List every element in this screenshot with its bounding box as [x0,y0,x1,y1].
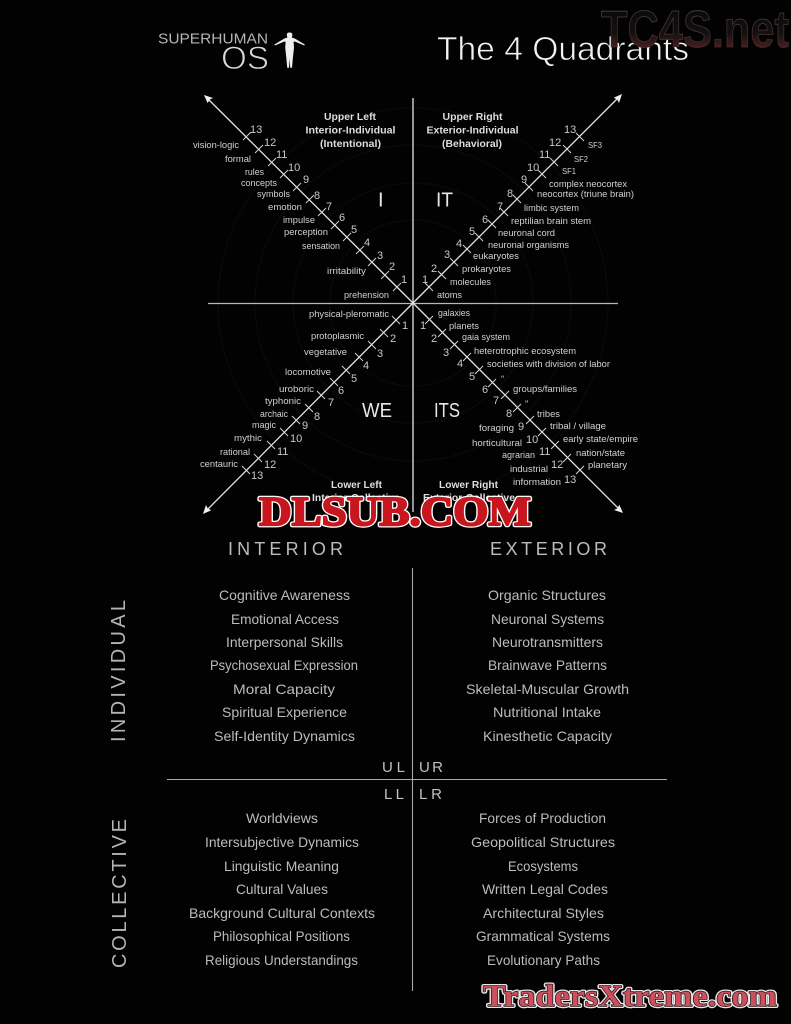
list: lower left interior collective: Religious Understandings [205,952,358,968]
levels: exterior collective: 5 [469,371,475,383]
levels: exterior collective: foraging [479,423,514,434]
list: upper right exterior individual: Organic Structures [488,587,606,603]
levels: interior collective: 1 [402,320,408,332]
panel: lower right quadrant [420,308,638,504]
levels: exterior individual [422,124,634,301]
list: upper right exterior individual: Brainwave Patterns [488,657,607,673]
levels: exterior collective: 8 [506,408,512,420]
levels: interior collective: 5 [351,373,357,385]
watermark: TradersXtreme.com: TradersXtreme.com [483,978,777,1013]
levels: exterior collective: industrial [510,464,548,475]
list: upper left interior individual: Moral Capacity [233,681,335,697]
list: upper right exterior individual: Kinesthetic Capacity [483,728,612,744]
levels: interior collective: vegetative [304,347,347,358]
levels: interior individual: 2 [389,261,395,273]
levels: exterior collective: early state/empire [563,434,638,445]
levels: interior collective: 3 [377,348,383,360]
list: lower left interior collective [189,810,375,968]
list: upper right exterior individual: Neuronal Systems [491,611,604,627]
levels: exterior collective: galaxies [438,308,470,319]
levels: interior individual: 12 [264,137,276,149]
heading: lower left [312,480,400,504]
levels: exterior individual: 10 [527,162,539,174]
levels: exterior collective: societies with division of labor [487,359,610,370]
levels: exterior individual: 7 [497,201,503,213]
levels: interior collective: 12 [264,459,276,471]
list: lower right exterior collective: Geopolitical Structures [471,834,615,850]
list: upper left interior individual [210,587,358,744]
levels: exterior collective: 4 [457,358,463,370]
levels: exterior individual: 11 [539,149,550,161]
list: upper left interior individual: Psychosexual Expression [210,657,358,673]
levels: exterior collective: ” [525,399,528,410]
heading: upper right: Upper Right [442,112,503,123]
levels: exterior individual: neuronal cord [498,228,555,239]
heading: upper left: Interior-Individual [306,126,396,136]
levels: interior individual: 5 [351,224,357,236]
levels: interior individual [193,124,407,301]
levels: interior individual: 8 [314,190,320,202]
levels: interior collective: archaic [260,409,288,420]
levels: exterior collective: 3 [443,347,449,359]
heading: upper left: Upper Left [324,112,377,123]
heading: lower right: Lower Right [439,480,499,491]
levels: exterior individual: reptilian brain stem [511,216,591,227]
heading: upper left: (Intentional) [320,139,381,150]
levels: exterior individual: prokaryotes [462,264,511,275]
levels: exterior individual: complex neocortex [549,179,627,190]
levels: interior individual: prehension [344,290,389,301]
levels: interior collective: uroboric [279,384,314,395]
levels: exterior collective: planetary [588,460,627,471]
levels: exterior collective: heterotrophic ecosystem [474,346,576,357]
quadrant codes: UL UR LL LR [382,759,443,803]
icon: human figure [274,32,305,68]
levels: interior collective: 2 [390,333,396,345]
watermark: TradersXtreme.com: TradersXtreme.com [483,978,777,1013]
heading: upper right [426,112,519,150]
levels: exterior individual: neocortex (triune brain) [537,189,634,200]
levels: interior individual: perception [284,227,328,238]
levels: exterior collective: information [513,477,561,488]
heading: upper right: (Behavioral) [442,139,502,150]
levels: interior collective: 8 [314,411,320,423]
levels: interior collective: physical-pleromatic [309,309,389,320]
levels: exterior collective: 10 [526,434,538,446]
levels: exterior individual: neuronal organisms [488,240,569,251]
levels: interior collective: 10 [290,433,302,445]
quadrant codes: UL UR LL LR: LL [384,786,404,803]
list: lower right exterior collective: Written Legal Codes [482,881,608,897]
list: lower right exterior collective [471,810,615,968]
list: upper right exterior individual [466,587,629,744]
levels: interior individual: 3 [377,250,383,262]
levels: exterior individual: 2 [431,263,437,275]
levels: interior individual: impulse [283,215,315,226]
list: lower left interior collective: Cultural Values [236,881,328,897]
levels: interior individual: irritability [327,266,366,277]
levels: interior collective [200,309,408,482]
levels: exterior collective: horticultural [472,438,522,449]
heading: upper left [306,112,396,150]
levels: exterior collective: 6 [482,384,488,396]
levels: exterior collective: gaia system [462,332,510,343]
levels: interior individual: sensation [302,241,340,252]
levels: interior individual: formal [225,154,251,165]
heading: lower right [423,480,515,504]
levels: interior collective: protoplasmic [311,331,364,342]
logo: Superhuman OS [158,30,305,76]
levels: exterior individual: 8 [507,188,513,200]
heading: upper right: Exterior-Individual [426,126,519,136]
list: upper left interior individual: Emotional Access [231,611,339,627]
list: lower left interior collective: Linguistic Meaning [224,858,339,874]
levels: interior collective: mythic [234,433,262,444]
levels: exterior individual: 3 [444,249,450,261]
levels: exterior individual: 1 [422,274,428,286]
watermark: DLSUB.COM: DLSUB.COM [259,488,531,534]
levels: interior collective: 9 [302,420,308,432]
levels: exterior collective: tribes [537,409,560,420]
list: lower right exterior collective: Architectural Styles [483,905,604,921]
levels: exterior collective: 12 [551,459,563,471]
levels: exterior collective: 11 [539,446,550,458]
title: The 4 Quadrants [437,30,689,67]
levels: interior collective: centauric [200,459,238,470]
table headings: interior and exterior [228,539,607,559]
levels: interior individual: vision-logic [193,140,239,151]
levels: exterior collective: agrarian [502,450,535,461]
panel: lower left quadrant [200,309,408,504]
list: lower left interior collective: Intersubjective Dynamics [205,834,359,850]
quadrant label IT: IT [436,190,453,212]
heading: lower left: Interior-Collective [312,493,400,504]
list: lower left interior collective: Worldviews [246,810,318,826]
levels: interior collective: 11 [277,446,288,458]
list: lower right exterior collective: Forces of Production [479,810,606,826]
levels: interior individual: 1 [401,274,407,286]
levels: interior collective: locomotive [285,367,331,378]
levels: exterior collective: planets [449,321,479,332]
list: upper left interior individual: Cognitive Awareness [219,587,350,603]
list: lower right exterior collective: Evolutionary Paths [487,952,600,968]
table headings: interior and exterior: EXTERIOR [490,539,607,559]
levels: exterior individual: 12 [549,137,561,149]
quadrant codes: UL UR LL LR: LR [419,786,442,803]
levels: interior individual: 6 [339,212,345,224]
levels: interior individual: rules [245,167,264,178]
levels: exterior collective: 1 [420,320,426,332]
levels: interior collective: 4 [363,360,369,372]
levels: interior individual: 13 [250,124,262,136]
levels: interior individual: 9 [303,174,309,186]
quadrant label WE: WE [362,400,392,422]
levels: exterior collective: 9 [518,421,524,433]
arrowheads [203,94,623,514]
levels: exterior individual: SF1 [562,167,577,176]
levels: exterior individual: 6 [482,214,488,226]
logo: Superhuman OS: SUPERHUMAN [158,30,268,48]
list: upper right exterior individual: Neurotransmitters [492,634,603,650]
quadrant label ITS: ITS [434,400,460,422]
levels: interior collective: typhonic [265,396,301,407]
levels: exterior individual: eukaryotes [473,251,519,262]
levels: interior collective: 13 [251,470,263,482]
table cross lines [167,568,667,991]
list: lower left interior collective: Background Cultural Contexts [189,905,375,921]
levels: interior individual: 10 [288,162,300,174]
levels: interior individual: 4 [364,237,370,249]
levels: exterior collective: “ [501,374,504,385]
list: upper right exterior individual: Skeletal-Muscular Growth [466,681,629,697]
side label: collective: COLLECTIVE [109,819,131,968]
levels: exterior individual: 4 [456,238,462,250]
list: lower left interior collective: Philosophical Positions [213,928,350,944]
levels: interior individual: emotion [268,202,302,213]
levels: interior collective: 7 [328,397,334,409]
levels: exterior collective: 2 [431,333,437,345]
heading: lower left: Lower Left [331,480,383,491]
list: upper left interior individual: Interpersonal Skills [226,634,343,650]
levels: exterior individual: SF2 [574,155,589,164]
levels: interior individual: symbols [257,189,290,200]
levels: exterior individual: atoms [437,290,462,301]
levels: exterior individual: 5 [469,226,475,238]
levels: exterior individual: 9 [521,174,527,186]
quadrant codes: UL UR LL LR: UL [382,759,405,776]
levels: interior collective: rational [220,447,250,458]
list: upper left interior individual: Spiritual Experience [222,704,347,720]
levels: exterior individual: limbic system [524,203,579,214]
levels: interior collective: 6 [338,385,344,397]
list: upper right exterior individual: Nutritional Intake [493,704,601,720]
panel: upper right quadrant [422,112,634,301]
levels: interior collective: magic [252,420,276,431]
tick marks [242,132,584,474]
logo: Superhuman OS: OS [221,40,269,76]
diagram: four quadrants spiral chart [193,94,638,514]
concentric dotted rings [218,108,608,498]
levels: exterior individual: molecules [450,277,491,288]
levels: exterior collective: 13 [564,474,576,486]
axes [205,96,621,512]
levels: interior individual: 11 [276,149,287,161]
levels: exterior collective: 7 [493,395,499,407]
list: upper left interior individual: Self-Identity Dynamics [214,728,355,744]
levels: exterior collective: groups/families [513,384,577,395]
levels: exterior collective [420,308,638,488]
panel: upper left quadrant [193,112,407,301]
list: lower right exterior collective: Ecosystems [508,858,578,874]
quadrant codes: UL UR LL LR: UR [419,759,443,776]
levels: interior individual: concepts [241,178,277,189]
levels: exterior individual: SF3 [588,141,603,150]
quadrant label I: I [378,190,384,212]
levels: exterior collective: tribal / village [550,421,606,432]
levels: exterior individual: 13 [564,124,576,136]
side label: individual: INDIVIDUAL [108,600,130,742]
list: lower right exterior collective: Grammatical Systems [476,928,610,944]
levels: interior individual: 7 [326,201,332,213]
table headings: interior and exterior: INTERIOR [228,539,343,559]
watermark: DLSUB.COM: DLSUB.COM [259,488,531,534]
levels: exterior collective: nation/state [576,448,625,459]
heading: lower right: Exterior-Collective [423,493,515,504]
